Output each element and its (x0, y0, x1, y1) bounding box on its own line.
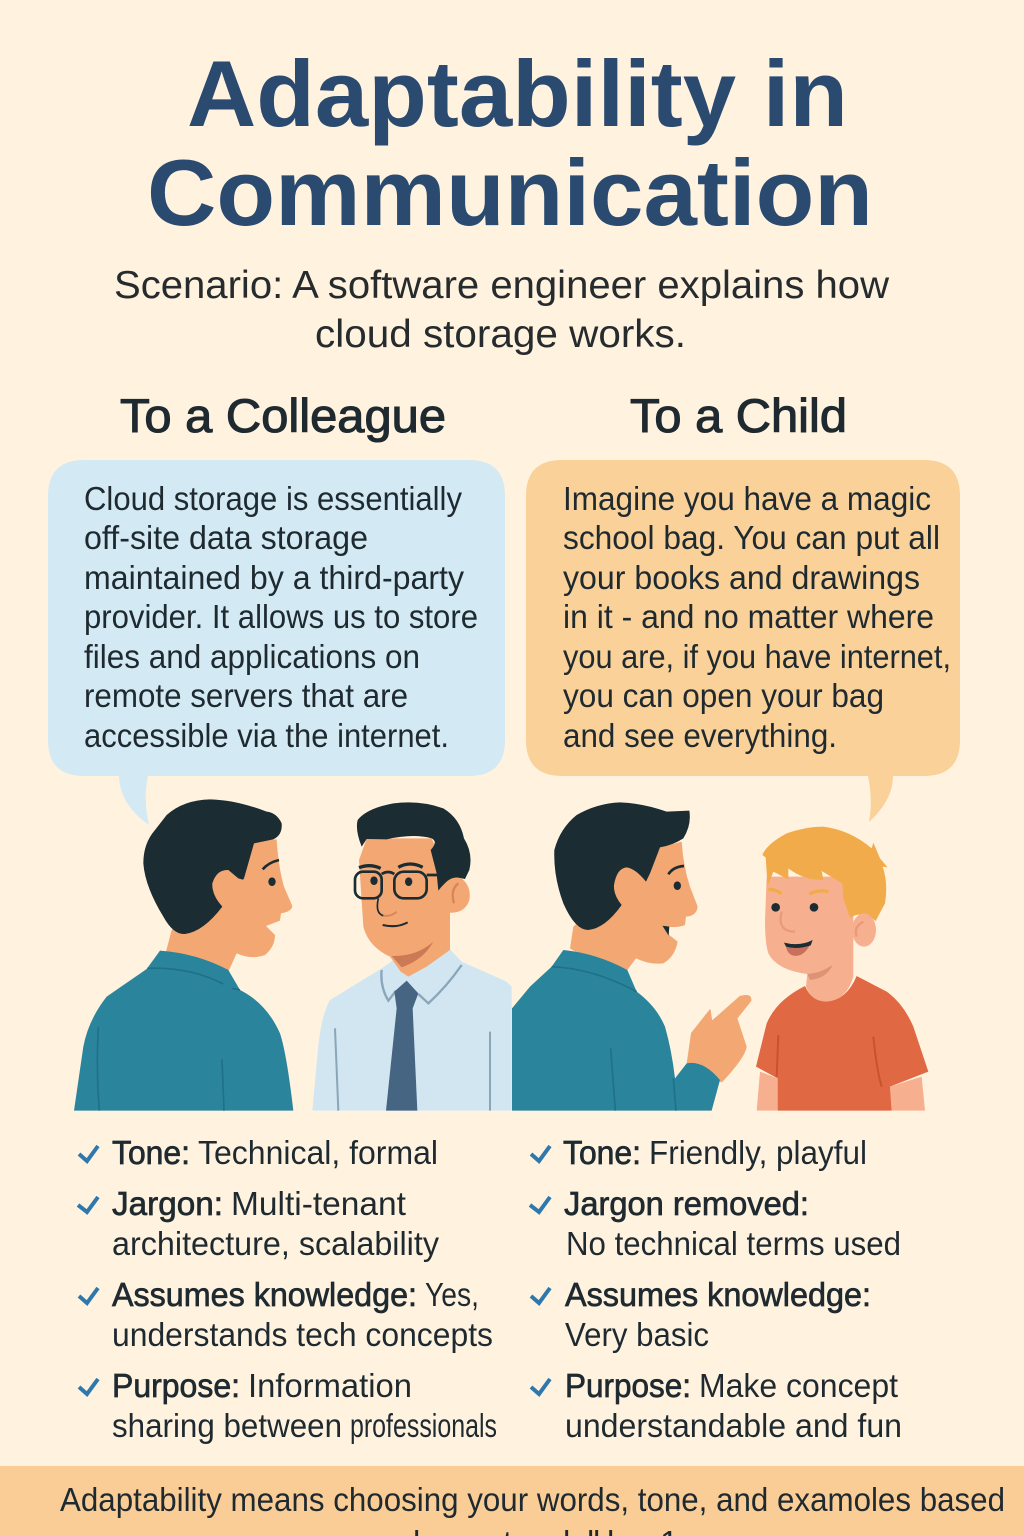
footer banner (0, 1466, 1024, 1536)
item: tone: Tone: (112, 1134, 190, 1171)
speech bubble: colleague (48, 460, 505, 825)
item: assumes knowledge: Assumes knowledge: (565, 1276, 871, 1313)
speech bubble: child (526, 460, 960, 822)
item: jargon (78, 1185, 439, 1262)
item: purpose: understandable and fun (565, 1407, 902, 1444)
speech bubble: colleague: accessible via the internet. (84, 717, 449, 754)
speech bubble: child: school bag. You can put all (563, 519, 940, 556)
title: Adaptability in (187, 41, 848, 146)
item: tone: Tone: (563, 1134, 641, 1171)
scenario subtitle: cloud storage works. (315, 313, 686, 356)
item: tone: Technical, formal (198, 1134, 438, 1171)
item: tone (531, 1134, 867, 1171)
item: jargon: Jargon: (112, 1185, 223, 1222)
item: assumes knowledge (79, 1276, 493, 1353)
speech bubble: colleague: maintained by a third-party (84, 559, 464, 596)
item: purpose: sharing between (112, 1407, 342, 1444)
scenario subtitle (114, 264, 890, 356)
item: purpose: Purpose: (565, 1367, 691, 1404)
item: tone: Friendly, playful (649, 1134, 867, 1171)
speech bubble: child: you are, if you have internet, (563, 638, 951, 675)
item: assumes knowledge: Yes, (425, 1276, 479, 1313)
item: jargon removed (530, 1185, 901, 1262)
title (147, 41, 873, 245)
speech bubble: child: Imagine you have a magic (563, 480, 931, 517)
speech bubble: colleague: files and applications on (84, 638, 420, 675)
item: tone (79, 1134, 438, 1171)
illustration: engineer pointing (512, 802, 751, 1111)
checklist: child (530, 1134, 902, 1444)
speech bubble: colleague: remote servers that are (84, 677, 408, 714)
checklist: colleague (78, 1134, 497, 1444)
item: purpose: professionals (350, 1407, 497, 1444)
illustration: child in orange shirt (756, 827, 928, 1111)
heading: to a child: To a Child (630, 389, 847, 442)
item: assumes knowledge: Assumes knowledge: (112, 1276, 417, 1313)
item: purpose (531, 1367, 902, 1444)
scenario subtitle: Scenario: A software engineer explains how (114, 264, 890, 307)
item: jargon: Multi-tenant (231, 1185, 406, 1222)
title: Communication (147, 140, 873, 245)
speech bubble: colleague: off-site data storage (84, 519, 368, 556)
illustration: colleague in shirt and glasses (312, 802, 512, 1111)
item: purpose (79, 1367, 497, 1444)
item: assumes knowledge (531, 1276, 871, 1353)
item: purpose: Purpose: (112, 1367, 240, 1404)
item: jargon: architecture, scalability (112, 1225, 439, 1262)
item: purpose: Information (248, 1367, 412, 1404)
item: assumes knowledge: understands tech concepts (112, 1316, 493, 1353)
speech bubble: colleague: provider. It allows us to store (84, 598, 478, 635)
speech bubble: child: and see everything. (563, 717, 837, 754)
item: assumes knowledge: Very basic (565, 1316, 709, 1353)
speech bubble: child: in it - and no matter where (563, 598, 934, 635)
illustration: engineer seen from behind (74, 799, 293, 1111)
heading: to a colleague: To a Colleague (120, 389, 446, 442)
item: purpose: Make concept (699, 1367, 898, 1404)
item: jargon removed: Jargon removed: (564, 1185, 809, 1222)
item: jargon removed: No technical terms used (566, 1225, 901, 1262)
speech bubble: child: you can open your bag (563, 677, 884, 714)
speech bubble: child: your books and drawings (563, 559, 920, 596)
speech bubble: colleague: Cloud storage is essentially (84, 480, 462, 517)
